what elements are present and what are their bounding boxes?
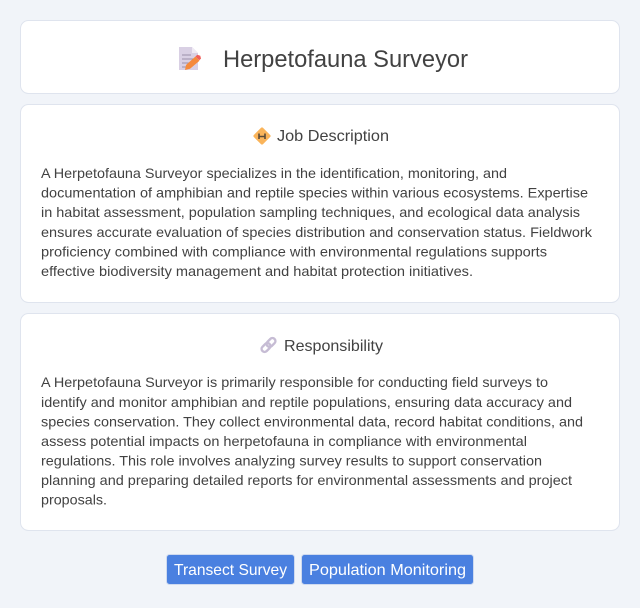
heading: job description: Job Description	[277, 128, 389, 145]
tag: population monitoring	[302, 554, 474, 584]
text: responsibility body: proposals.	[41, 491, 107, 507]
text: responsibility body: assess potential impacts on herpetofauna in compliance with environmental	[41, 433, 527, 449]
tag: transect survey: Transect Survey	[174, 562, 287, 579]
text: job description body: A Herpetofauna Surveyor specializes in the identification, monitoring, and	[41, 165, 507, 181]
text: job description body: effective biodiversity management and habitat protection initiatives.	[41, 263, 473, 279]
icon: orange diamond sign	[253, 127, 271, 145]
heading: responsibility: Responsibility	[284, 338, 383, 355]
panel: job description	[20, 104, 620, 302]
text: responsibility body: species conservation. They collect environmental data, record habitat conditions, and	[41, 413, 583, 429]
text: job description body: in habitat assessment, population sampling techniques, and ecological data analysis	[41, 204, 580, 220]
text: responsibility body	[41, 374, 583, 507]
icon: chain link	[260, 337, 277, 353]
text: responsibility body: planning and preparing detailed reports for environmental assessments and project	[41, 472, 572, 488]
icon: document with pencil	[179, 47, 201, 70]
text: job description body: documentation of amphibian and reptile species within various ecosystems. Expertise	[41, 185, 588, 201]
text: responsibility body: regulations. This role involves analyzing survey results to support conservation	[41, 452, 542, 468]
text: responsibility body: A Herpetofauna Surveyor is primarily responsible for conducting field surveys to	[41, 374, 548, 390]
text: job description body: ensures accurate evaluation of species distribution and conservation status. Fieldwork	[41, 224, 593, 240]
text: job description body: proficiency combined with compliance with environmental regulations supports	[41, 243, 547, 259]
text: responsibility body: identify and monitor amphibian and reptile populations, ensuring data accuracy and	[41, 394, 572, 410]
tag: population monitoring: Population Monitoring	[309, 562, 466, 579]
panel: title	[20, 20, 620, 94]
text: job description body	[41, 165, 593, 279]
panel: responsibility	[20, 314, 620, 530]
tag: transect survey	[166, 554, 294, 584]
heading: job title: Herpetofauna Surveyor	[223, 46, 468, 73]
